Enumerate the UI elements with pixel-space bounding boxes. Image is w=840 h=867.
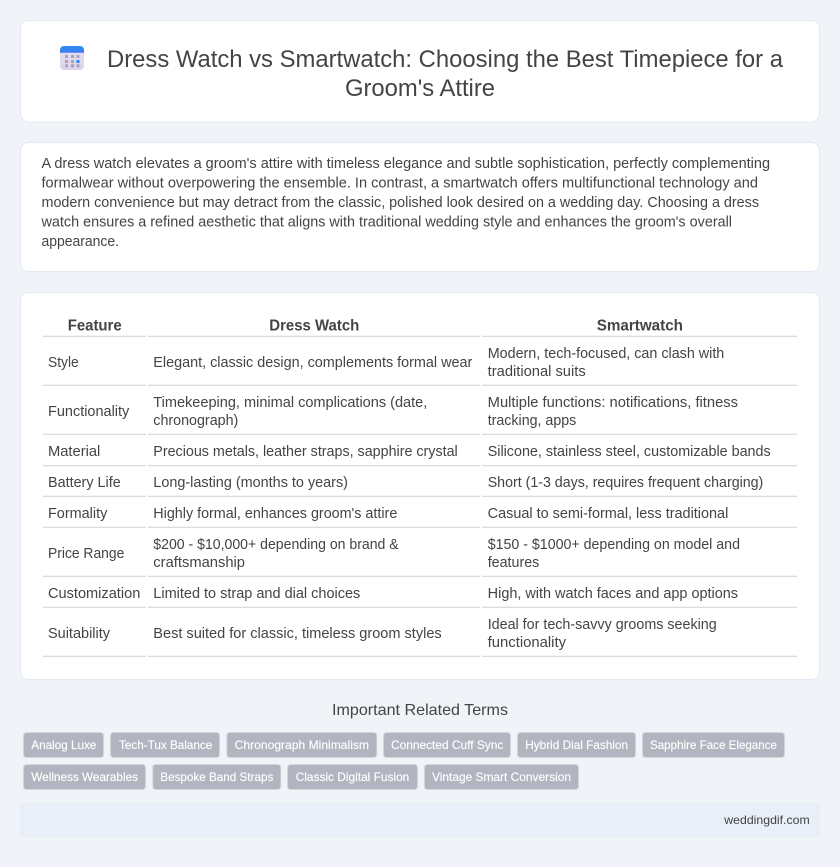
row: price range: Price Range [48,546,124,562]
tag: Tech-Tux Balance [110,732,220,758]
row: battery life: Battery Life [48,475,121,491]
row: functionality: Timekeeping, minimal complications (date, [153,395,427,411]
row: customization: High, with watch faces and app options [488,586,738,602]
title: Groom's Attire [345,75,495,102]
tag: Sapphire Face Elegance [642,732,784,758]
row: functionality: tracking, apps [488,413,576,429]
text block: introduction paragraph: appearance. [42,234,119,250]
row: material: Silicone, stainless steel, customizable bands [488,444,771,460]
row: suitability: Suitability [48,626,111,642]
table header row: Feature [68,318,122,334]
tag: Hybrid Dial Fashion [518,732,636,758]
row: style: Elegant, classic design, complements formal wear [153,355,472,371]
text block: introduction paragraph [41,156,770,250]
row: suitability: Ideal for tech-savvy grooms seeking [488,617,717,633]
row: price range: craftsmanship [153,555,245,571]
tag list [24,732,784,790]
row: battery life [48,475,763,491]
tag: Analog Luxe: Analog Luxe [31,738,97,752]
tag: Vintage Smart Conversion: Vintage Smart Conversion [432,770,571,784]
row: customization: Customization [48,586,140,602]
title [107,46,784,102]
footer [20,803,820,837]
row: formality [48,506,728,522]
title: Dress Watch vs Smartwatch: Choosing the Best Timepiece for a [107,46,784,73]
table header row [68,318,683,334]
tag: Bespoke Band Straps [153,764,281,790]
tag: Wellness Wearables [24,764,146,790]
table header row: Dress Watch [269,318,359,334]
row: price range: features [488,555,539,571]
row: customization: Limited to strap and dial choices [153,586,360,602]
icon: calendar [60,46,84,70]
tag: Wellness Wearables: Wellness Wearables [31,770,138,784]
row: material: Material [48,444,100,460]
text block: introduction paragraph: modern convenience but may detract from the classic, polished look desired on a wedding day. Choosing a dress [42,195,759,211]
tag: Sapphire Face Elegance: Sapphire Face Elegance [650,738,777,752]
row: battery life: Long-lasting (months to years) [153,475,348,491]
row: battery life: Short (1-3 days, requires frequent charging) [488,475,763,491]
tag: Analog Luxe [24,732,104,758]
text block: introduction paragraph: formalwear without overpowering the ensemble. In contrast, a smartwatch offers multifunctional technology and [42,176,758,192]
row: functionality: chronograph) [153,413,238,429]
row: style: traditional suits [488,364,586,380]
row: style [48,346,724,380]
tag: Chronograph Minimalism [227,732,377,758]
tag: Connected Cuff Sync [384,732,510,758]
row: formality: Formality [48,506,108,522]
text block: introduction paragraph: watch ensures a refined aesthetic that aligns with traditional wedding style and enhances the groom's overall [41,214,732,230]
row: material: Precious metals, leather straps, sapphire crystal [153,444,458,460]
tag: Classic Digital Fusion [288,764,418,790]
row: functionality [48,395,738,429]
row: functionality: Multiple functions: notifications, fitness [488,395,738,411]
row: material [48,444,771,460]
tag: Chronograph Minimalism: Chronograph Minimalism [235,738,369,752]
footer: site name: weddingdif.com [723,813,810,827]
tag: Bespoke Band Straps: Bespoke Band Straps [160,770,273,784]
row: formality: Casual to semi-formal, less traditional [488,506,728,522]
panel: introduction [20,142,820,272]
row: formality: Highly formal, enhances groom's attire [153,506,397,522]
tag: Tech-Tux Balance: Tech-Tux Balance [119,738,213,752]
tag: Vintage Smart Conversion [424,764,578,790]
row: style: Modern, tech-focused, can clash with [488,346,724,362]
row: price range: $200 - $10,000+ depending on brand & [153,537,399,553]
tag: Classic Digital Fusion: Classic Digital Fusion [296,770,409,784]
heading: important related terms: Important Related Terms [332,702,508,719]
row: customization [48,586,738,602]
tag: Connected Cuff Sync: Connected Cuff Sync [391,738,503,752]
row: price range [48,537,740,571]
row: suitability: Best suited for classic, timeless groom styles [153,626,442,642]
row: price range: $150 - $1000+ depending on model and [488,537,740,553]
tag: Hybrid Dial Fashion: Hybrid Dial Fashion [525,738,628,752]
row: functionality: Functionality [48,404,130,420]
row: style: Style [48,355,79,371]
row: suitability: functionality [488,635,567,651]
panel: comparison table [20,292,820,680]
row: suitability [48,617,717,651]
table header row: Smartwatch [597,318,683,334]
text block: introduction paragraph: A dress watch elevates a groom's attire with timeless elegance and subtle sophistication, perfectly complementing [42,156,770,172]
panel: header [20,20,820,122]
